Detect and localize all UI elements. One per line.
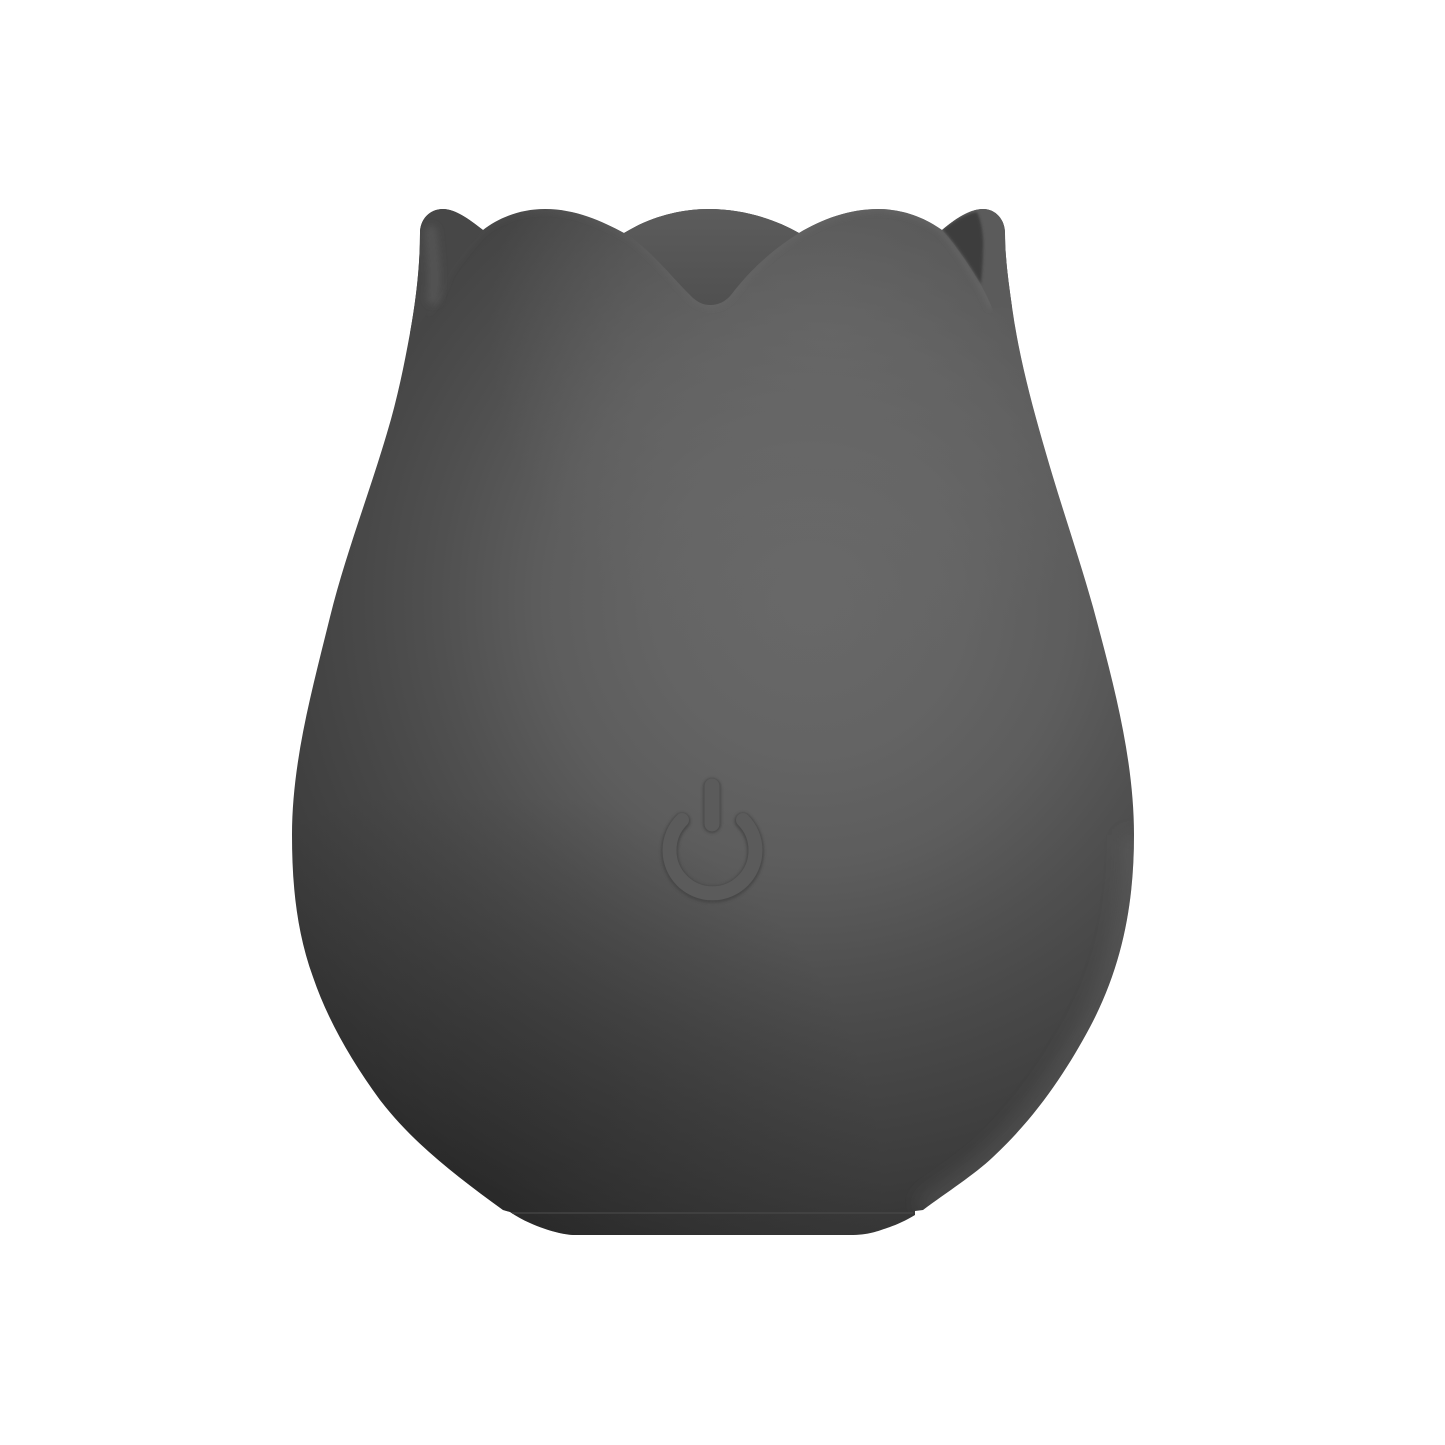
product illustration: tulip-shaped device: [292, 209, 1134, 1235]
left ear: [410, 209, 483, 332]
lower right rim light: [923, 835, 1134, 1210]
rear petal: [624, 209, 799, 305]
icon: power button: [670, 786, 755, 894]
upper body glow: [612, 209, 1044, 448]
petal edge highlight: [942, 230, 980, 285]
right ear: [942, 209, 1012, 306]
power icon shadow: [670, 787, 755, 894]
power icon face: [670, 786, 755, 893]
base seam: [512, 1212, 913, 1214]
device body silhouette: [292, 209, 1134, 1235]
lower left shade: [312, 974, 596, 1235]
